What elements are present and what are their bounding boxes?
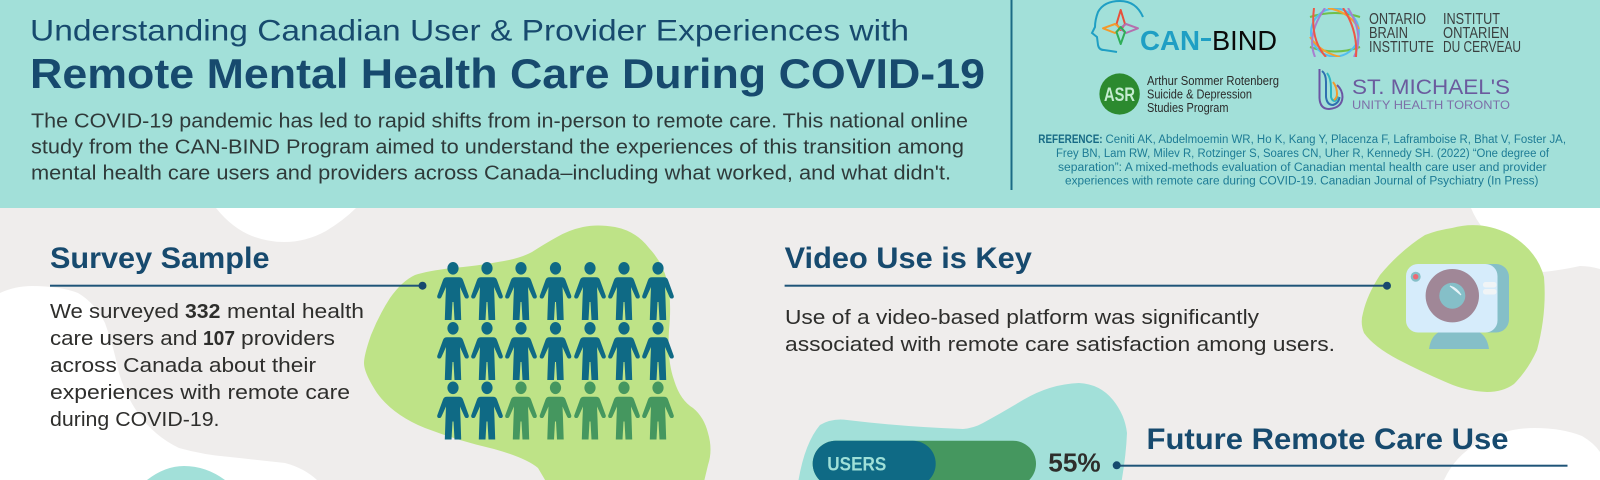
reference citation: separation”: A mixed-methods evaluation of Canadian mental health care user and provider (1058, 162, 1547, 174)
survey text: care users and (50, 328, 197, 350)
survey text: across Canada about their (50, 355, 316, 377)
intro paragraph: The COVID-19 pandemic has led to rapid shifts from in-person to remote care. This national online (31, 110, 968, 132)
survey text (50, 301, 364, 431)
logo: Ontario Brain Institute: ONTARIEN (1443, 25, 1509, 42)
bar: users 55% (813, 441, 1036, 480)
header panel (0, 0, 1600, 208)
pictogram: users and providers (437, 262, 674, 440)
logo: CAN-BIND (1092, 1, 1277, 56)
survey text: mental health (227, 301, 364, 323)
logo: ASR: ASR (1104, 85, 1135, 106)
panel: future remote care use (797, 383, 1568, 480)
logo: Ontario Brain Institute: INSTITUTE (1369, 39, 1434, 56)
survey text: 107 (203, 328, 235, 350)
value: 55%: 55% (1048, 448, 1101, 478)
logo: CAN-BIND: CAN (1140, 25, 1200, 56)
logo: Ontario Brain Institute: ONTARIO (1369, 11, 1426, 28)
reference citation: experiences with remote care during COVID-19. Canadian Journal of Psychiatry (In Press) (1065, 176, 1539, 188)
title line 2: Remote Mental Health Care During COVID-19 (30, 50, 985, 97)
reference citation (1038, 134, 1566, 188)
background: lower section (0, 208, 1600, 480)
decorative white blobs (0, 208, 1600, 480)
logo: Ontario Brain Institute: DU CERVEAU (1443, 39, 1521, 56)
heading connector (1113, 461, 1568, 469)
logo: ASR: Arthur Sommer Rotenberg (1147, 73, 1279, 88)
bar: users 55%: USERS (827, 454, 886, 476)
heading: future remote care use: Future Remote Care Use (1146, 423, 1508, 456)
reference citation: REFERENCE: (1038, 134, 1103, 146)
heading connector (785, 282, 1391, 290)
logo: ASR (1099, 73, 1279, 115)
teal blob behind bar (797, 383, 1127, 480)
video text: associated with remote care satisfaction among users. (785, 334, 1335, 356)
logo: ASR: Studies Program (1147, 100, 1228, 115)
intro paragraph (31, 110, 968, 184)
logo: ASR: Suicide & Depression (1147, 86, 1252, 102)
logo: St. Michael's (1320, 69, 1510, 112)
green blob behind camera (1362, 225, 1545, 392)
survey text: during COVID-19. (50, 409, 220, 431)
panel: survey sample (50, 226, 710, 480)
logo: Ontario Brain Institute (1310, 8, 1521, 57)
heading: video use: Video Use is Key (785, 242, 1032, 275)
logo: CAN-BIND: BIND (1212, 25, 1277, 56)
decorative teal blob bottom left (147, 466, 225, 480)
intro paragraph: mental health care users and providers across Canada–including what worked, and what didn't. (31, 162, 951, 184)
logo: Ontario Brain Institute: INSTITUT (1443, 11, 1500, 28)
green blob behind people (364, 226, 710, 480)
video text (785, 307, 1335, 356)
survey text: We surveyed (50, 301, 179, 323)
heading connector (50, 282, 426, 290)
logo: St. Michael's: ST. MICHAEL'S (1352, 76, 1510, 99)
logo: Ontario Brain Institute: BRAIN (1369, 25, 1408, 42)
survey text: experiences with remote care (50, 382, 350, 404)
panel: video use (785, 225, 1545, 392)
reference citation: Ceniti AK, Abdelmoemin WR, Ho K, Kang Y, Placenza F, Laframboise R, Bhat V, Foster JA, (1106, 134, 1566, 146)
heading: survey sample: Survey Sample (50, 242, 270, 275)
title line 1: Understanding Canadian User & Provider Experiences with (30, 14, 909, 48)
reference citation: Frey BN, Lam RW, Milev R, Rotzinger S, Soares CN, Uher R, Kennedy SH. (2022) “One degree of (1056, 148, 1550, 160)
intro paragraph: study from the CAN-BIND Program aimed to understand the experiences of this transition among (31, 136, 964, 158)
logo: St. Michael's: UNITY HEALTH TORONTO (1352, 98, 1510, 112)
survey text: providers (241, 328, 335, 350)
survey text: 332 (185, 301, 220, 323)
icon: webcam (1406, 264, 1509, 349)
header divider (1010, 0, 1012, 190)
video text: Use of a video-based platform was significantly (785, 307, 1259, 329)
